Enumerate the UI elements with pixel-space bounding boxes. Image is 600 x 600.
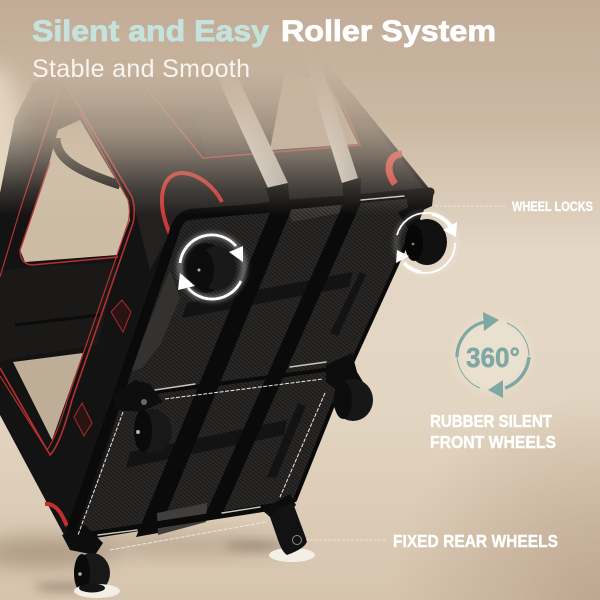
title: Roller System [281, 15, 496, 48]
floor plates [74, 548, 315, 598]
left window crossbar [56, 138, 120, 185]
callout: rubber silent front wheels: FRONT WHEELS [430, 432, 556, 452]
left mesh panel [0, 262, 117, 362]
left pouch [130, 270, 180, 372]
wheel: middle right [326, 353, 373, 421]
upper windows [197, 90, 250, 157]
callout: rubber silent front wheels [430, 411, 556, 452]
rear right bracket [264, 494, 296, 518]
strap 2 [203, 196, 364, 520]
wheel: rear left [62, 525, 110, 593]
rotation arrows: top right wheel [396, 213, 457, 273]
title [32, 15, 496, 48]
dashed wheel outline [78, 379, 325, 550]
callout: rubber silent front wheels: RUBBER SILENT [430, 411, 552, 431]
lower left window [13, 353, 83, 440]
wheel: rear left contact [79, 584, 105, 592]
floor shadows [0, 537, 295, 591]
rotation arrows: top left wheel [178, 235, 244, 299]
crib body silhouette [0, 81, 428, 534]
subtitle: Stable and Smooth [32, 55, 250, 83]
underside fabric [80, 192, 432, 535]
red corner arcs [45, 154, 402, 526]
icon: 360 degree rotation: 360° [466, 342, 520, 373]
wheel: top left [183, 243, 236, 293]
icon: 360 degree rotation [455, 312, 531, 398]
title: Silent and Easy [32, 15, 269, 48]
frame [72, 192, 430, 538]
upper red piping [140, 80, 360, 158]
product: folding crib seen from below [0, 40, 447, 593]
left red piping [0, 83, 134, 455]
underside dark panels [126, 272, 366, 478]
top flap [290, 205, 340, 222]
strap 1 [136, 208, 292, 537]
wheel: rear right [270, 503, 307, 555]
diamond tags [74, 300, 131, 436]
handle elbows [266, 178, 434, 216]
grey flap [157, 503, 207, 535]
callout: fixed rear wheels: FIXED REAR WHEELS [393, 531, 558, 551]
left cross bar [15, 315, 100, 325]
handle bars [220, 80, 358, 188]
wheel: middle left [119, 380, 172, 452]
wheel: top right [398, 206, 447, 265]
side fabric lighter shading [112, 162, 423, 270]
left window [20, 120, 130, 262]
chrome bar glints [98, 196, 404, 535]
